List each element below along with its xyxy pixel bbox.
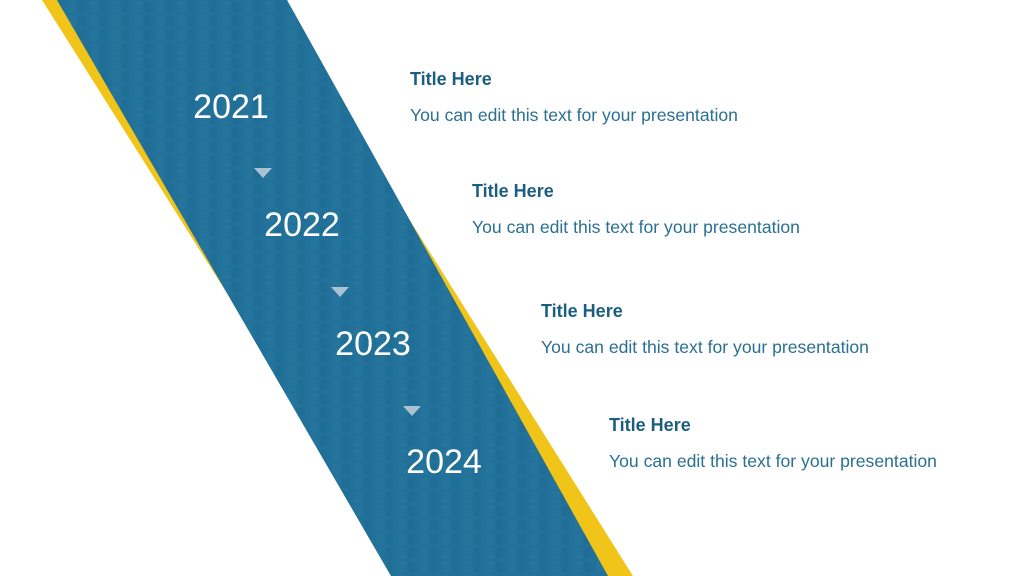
years: [193, 88, 482, 481]
yellow strip left: [42, 0, 228, 295]
item 4: [609, 415, 937, 471]
item 2: [472, 181, 800, 237]
item 2: You can edit this text for your presentation: [472, 217, 800, 237]
arrows: [254, 168, 421, 416]
years: 2023: [335, 325, 411, 363]
item 3: You can edit this text for your presentation: [541, 337, 869, 357]
item 1: You can edit this text for your presentation: [410, 105, 738, 125]
item 3: Title Here: [541, 301, 623, 321]
item 3: [541, 301, 869, 357]
years: 2021: [193, 88, 269, 126]
item 4: Title Here: [609, 415, 691, 435]
years: 2024: [406, 443, 482, 481]
item 1: [410, 69, 738, 125]
yellow strip right: [350, 125, 633, 576]
item 1: Title Here: [410, 69, 492, 89]
item 4: You can edit this text for your presentation: [609, 451, 937, 471]
blue photo band: [57, 0, 608, 576]
years: 2022: [264, 206, 340, 244]
item 2: Title Here: [472, 181, 554, 201]
